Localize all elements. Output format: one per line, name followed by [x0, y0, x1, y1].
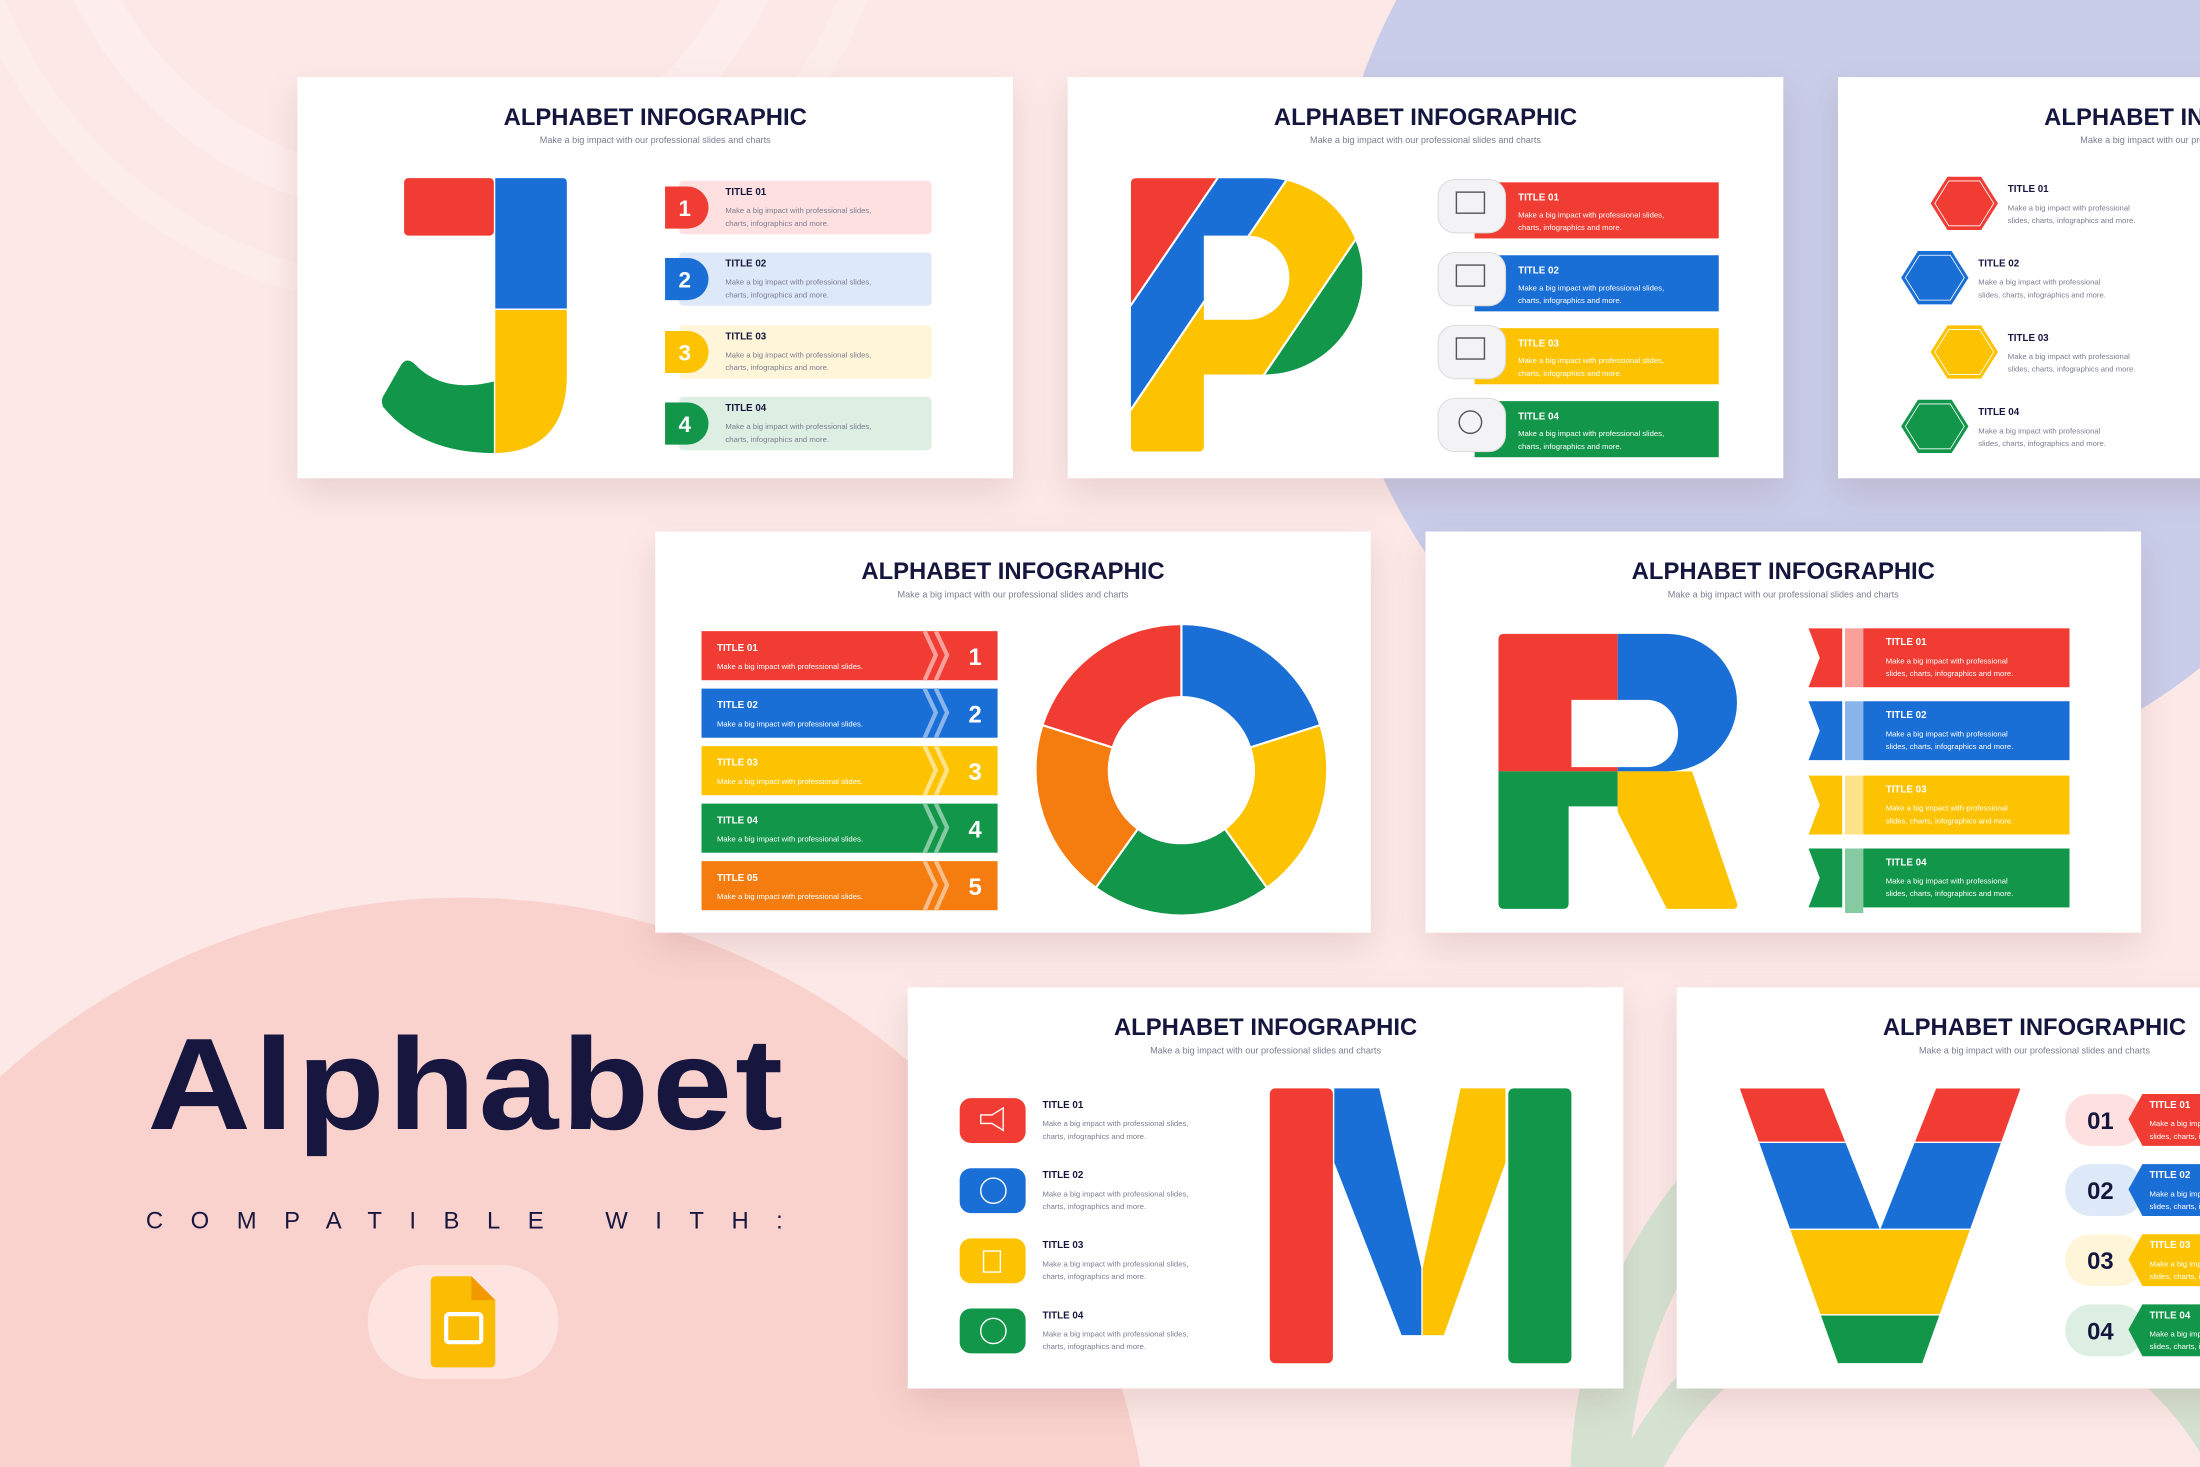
hex items: Make a big impact with professional	[1978, 278, 2101, 287]
slide: V: ALPHABET INFOGRAPHIC	[1883, 1014, 2186, 1041]
items: charts, infographics and more.	[1518, 442, 1622, 451]
bars: Make a big impact with professional slides.	[717, 662, 863, 671]
items: Make a big impact with professional slides,	[1042, 1259, 1189, 1268]
items: TITLE 04	[1886, 857, 1927, 868]
items: Make a big impact with professional slides,	[725, 351, 871, 360]
slide: M: Make a big impact with our professional slides and charts	[1150, 1045, 1381, 1055]
items: TITLE 01	[2149, 1100, 2191, 1111]
items: TITLE 02	[725, 258, 767, 269]
items: TITLE 02	[1886, 710, 1927, 721]
items: Make a big impact with professional slides,	[1042, 1189, 1189, 1198]
slide: P: ALPHABET INFOGRAPHIC	[1274, 104, 1577, 131]
items	[960, 1098, 1189, 1353]
slide: V	[1677, 987, 2200, 1388]
slide: J: ALPHABET INFOGRAPHIC	[504, 104, 807, 131]
bars: TITLE 05	[717, 873, 758, 884]
items: Make a big impact with professional slides,	[1518, 356, 1664, 365]
hex items: TITLE 03	[2008, 333, 2049, 344]
items: slides, charts, infographics and more.	[1886, 816, 2013, 825]
items: Make a big impact with professional	[1886, 729, 2008, 738]
bars: Make a big impact with professional slides.	[717, 719, 863, 728]
bars: 4	[968, 816, 982, 843]
hex items: slides, charts, infographics and more.	[2008, 365, 2135, 374]
items: 02	[2087, 1178, 2114, 1205]
items: Make a big impact with professional slides,	[725, 206, 871, 215]
items: TITLE 02	[2149, 1170, 2191, 1181]
items: Make a big impact with professional slides,	[725, 278, 871, 287]
slide: V: Make a big impact with our professional slides and charts	[1919, 1045, 2150, 1055]
items: 01	[2087, 1108, 2114, 1135]
heading: Alphabet: Alphabet	[147, 1011, 786, 1157]
items: 1	[678, 196, 691, 221]
slide: R	[1426, 532, 2141, 933]
items: Make a big impact with professional slides,	[725, 422, 871, 431]
items: Make a big impact with professional slides,	[1042, 1119, 1189, 1128]
letter P	[1130, 178, 1362, 452]
items: charts, infographics and more.	[1518, 223, 1622, 232]
slide: R: ALPHABET INFOGRAPHIC	[1632, 558, 1935, 585]
slide: O: ALPHABET INFOGRAPHIC	[861, 558, 1165, 585]
items: Make a big impact with professional	[1886, 656, 2008, 665]
items: charts, infographics and more.	[725, 435, 829, 444]
bars: 2	[968, 701, 982, 728]
letter R	[1498, 634, 1737, 909]
donut O	[1035, 624, 1327, 916]
items: Make a big impact with professional slides,	[1518, 283, 1664, 292]
items: TITLE 03	[1518, 338, 1559, 349]
bars: TITLE 03	[717, 758, 758, 769]
items: TITLE 01	[1518, 193, 1559, 204]
items: charts, infographics and more.	[1518, 296, 1622, 305]
letter J	[382, 178, 567, 453]
hex items: slides, charts, infographics and more.	[1978, 290, 2106, 299]
items: 4	[678, 412, 691, 437]
items: charts, infographics and more.	[1042, 1342, 1146, 1351]
items: charts, infographics and more.	[725, 290, 829, 299]
items	[665, 181, 932, 450]
text: compatible with: COMPATIBLE WITH:	[146, 1208, 810, 1234]
items	[1809, 628, 2070, 913]
items: TITLE 03	[1886, 784, 1927, 795]
bars: TITLE 01	[717, 643, 758, 654]
slide: P	[1068, 77, 1783, 478]
items: TITLE 04	[1518, 411, 1559, 422]
items: TITLE 04	[1042, 1310, 1084, 1321]
slide: O: Make a big impact with our professional slides and charts	[898, 589, 1129, 599]
items: 04	[2087, 1318, 2114, 1345]
items: slides, charts, infographics and more.	[1886, 889, 2013, 898]
hex items: Make a big impact with professional	[2008, 352, 2130, 361]
hex items: TITLE 02	[1978, 258, 2020, 269]
hex items: TITLE 04	[1978, 407, 2020, 418]
items: charts, infographics and more.	[1042, 1202, 1146, 1211]
items: Make a big impact with professional slides,	[1518, 429, 1664, 438]
hex items: Make a big impact with professional	[2008, 203, 2130, 212]
bars: 5	[968, 874, 982, 901]
slide: J	[297, 77, 1013, 478]
items: TITLE 02	[1042, 1170, 1084, 1181]
hex items: Make a big impact with professional	[1978, 426, 2101, 435]
items: TITLE 01	[1042, 1100, 1084, 1111]
hex items: slides, charts, infographics and more.	[1978, 439, 2106, 448]
icon: google slides	[368, 1265, 558, 1379]
bars	[702, 631, 998, 910]
slide: M: ALPHABET INFOGRAPHIC	[1114, 1014, 1417, 1041]
letter M	[1270, 1088, 1571, 1363]
slide: M	[908, 987, 1623, 1388]
items	[1438, 180, 1719, 457]
items: TITLE 03	[2149, 1240, 2191, 1251]
items: TITLE 01	[725, 187, 767, 198]
hex items: TITLE 01	[2008, 184, 2049, 195]
slide: O	[655, 532, 1371, 933]
hex items	[1901, 177, 2135, 453]
slide: hexagons	[1838, 77, 2200, 478]
bars: 3	[968, 759, 982, 786]
items: charts, infographics and more.	[1518, 369, 1622, 378]
items: TITLE 04	[2149, 1310, 2191, 1321]
letter V	[1740, 1088, 2020, 1364]
items: Make a big impact with professional	[1886, 877, 2008, 886]
items: TITLE 03	[725, 331, 767, 342]
items: charts, infographics and more.	[725, 363, 829, 372]
bars: 1	[968, 644, 982, 671]
items: charts, infographics and more.	[1042, 1132, 1146, 1141]
items: TITLE 03	[1042, 1240, 1084, 1251]
items: TITLE 04	[725, 403, 767, 414]
items: 2	[678, 268, 691, 293]
slide: J: Make a big impact with our professional slides and charts	[540, 135, 771, 145]
bars: TITLE 02	[717, 700, 758, 711]
items: Make a big impact with professional slides,	[1042, 1330, 1189, 1339]
items: Make a big impact with professional slides,	[1518, 210, 1664, 219]
items: charts, infographics and more.	[725, 219, 829, 228]
bars: TITLE 04	[717, 815, 758, 826]
items	[2065, 1094, 2200, 1356]
bars: Make a big impact with professional slides.	[717, 834, 863, 843]
items: 03	[2087, 1248, 2114, 1275]
items: slides, charts, infographics and more.	[1886, 669, 2013, 678]
items: slides, charts, infographics and more.	[1886, 742, 2013, 751]
hex items: slides, charts, infographics and more.	[2008, 216, 2135, 225]
bars: Make a big impact with professional slides.	[717, 777, 863, 786]
items: 3	[678, 340, 691, 365]
slide: R: Make a big impact with our professional slides and charts	[1668, 589, 1899, 599]
items: TITLE 01	[1886, 637, 1927, 648]
items: charts, infographics and more.	[1042, 1272, 1146, 1281]
bars: Make a big impact with professional slides.	[717, 892, 863, 901]
items: TITLE 02	[1518, 265, 1559, 276]
slide: P: Make a big impact with our professional slides and charts	[1310, 135, 1541, 145]
items: Make a big impact with professional	[1886, 804, 2008, 813]
